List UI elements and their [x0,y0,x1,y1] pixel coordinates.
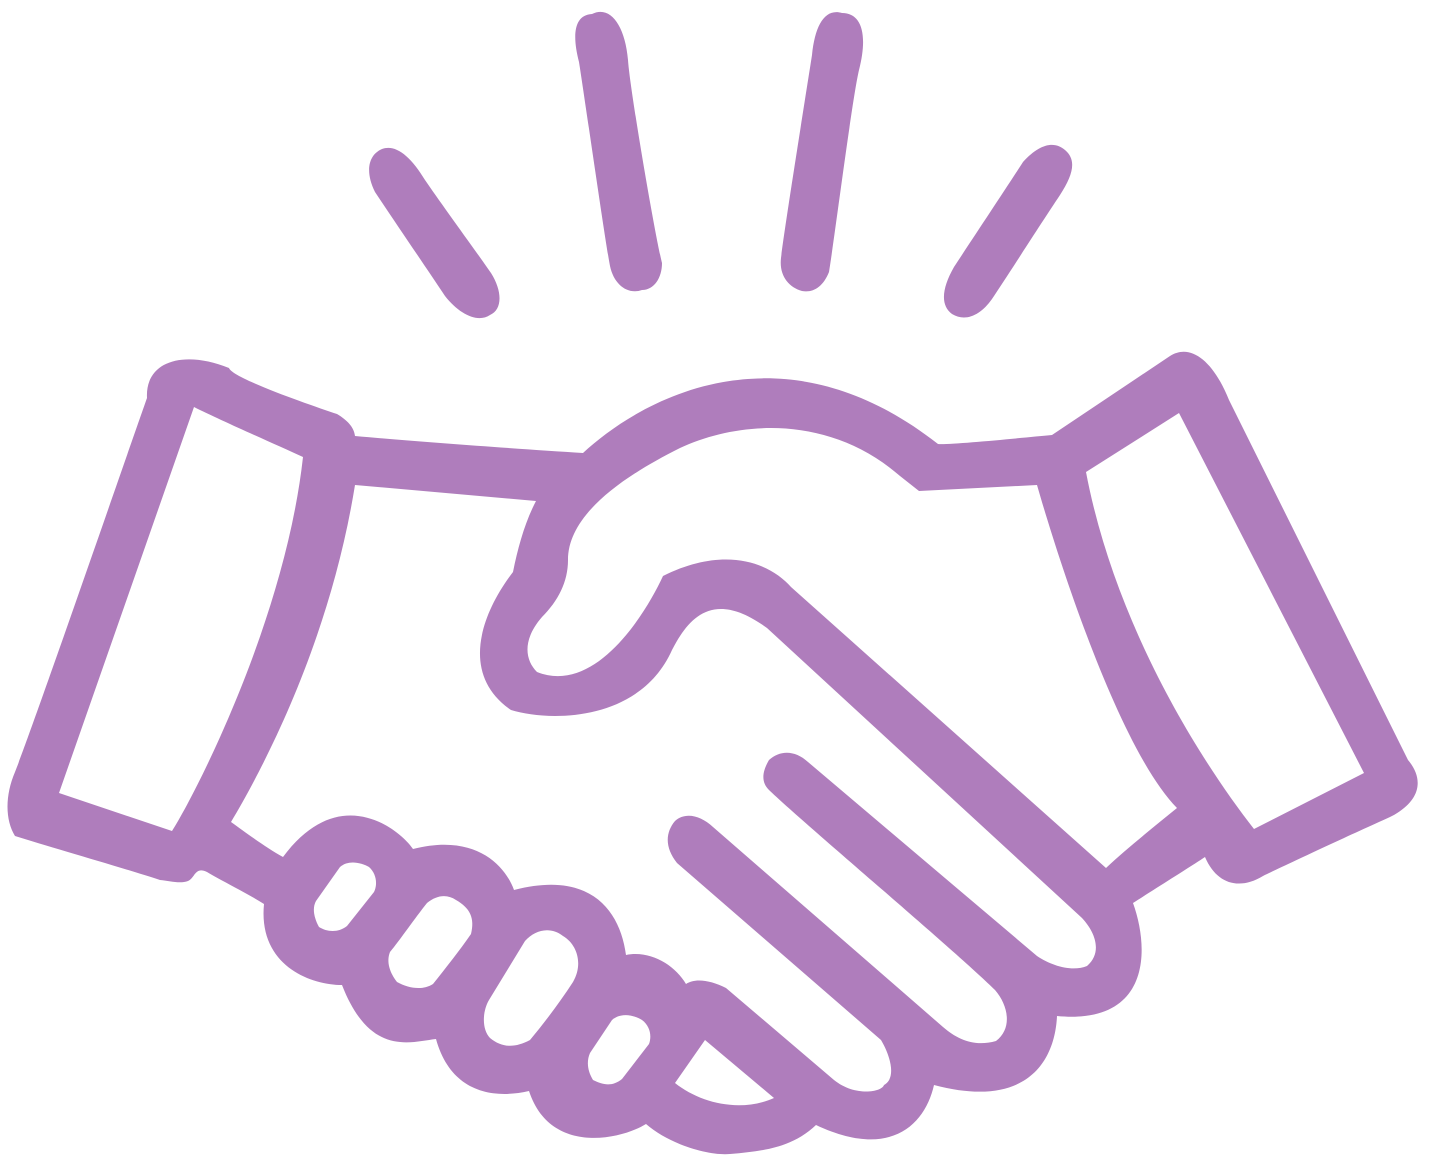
hands silhouette [8,352,1418,1154]
finger 3 [484,930,578,1046]
finger 1 [314,862,376,931]
ray: centre right [781,12,863,291]
left cuff [59,407,303,831]
thumb gap [675,1040,774,1105]
finger 4 [588,1015,650,1084]
finger 2 [388,896,472,988]
ray: far left [369,148,500,318]
left hand with extended fingers [231,485,1096,1092]
icon: four radiating rays above the handshake [369,12,1072,318]
ray: far right [944,145,1072,318]
right hand with thumb [527,428,1177,868]
ray: centre left [575,12,662,291]
icon: clasped hands [8,352,1418,1154]
right cuff [1086,413,1364,829]
